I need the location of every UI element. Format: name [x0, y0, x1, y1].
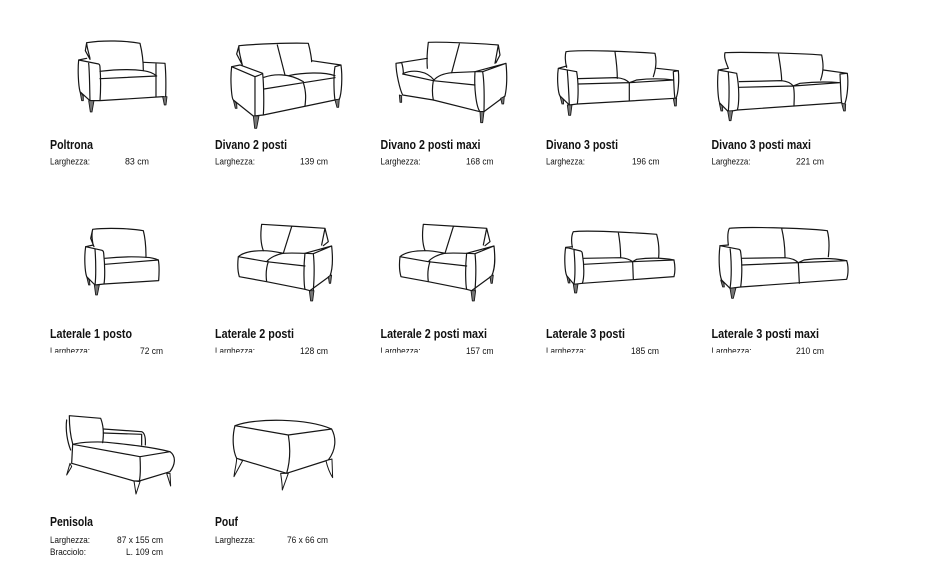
Laterale 2 posti maxi title: Laterale 2 posti maxi — [380, 326, 487, 341]
Poltrona title: Poltrona — [50, 137, 94, 152]
Laterale 1 posto title: Laterale 1 posto — [50, 326, 132, 341]
icon: Poltrona — [78, 41, 167, 112]
Laterale 3 posti width — [546, 348, 658, 354]
icon: Divano 2 posti — [231, 43, 342, 128]
Penisola dimensions: Larghezza: — [50, 535, 90, 545]
Divano 3 posti maxi width — [712, 156, 824, 166]
icon: Laterale 3 posti maxi — [719, 228, 848, 298]
Divano 2 posti width: Larghezza: — [215, 156, 255, 166]
Penisola dimensions — [50, 535, 163, 557]
Divano 2 posti width — [215, 156, 328, 166]
Divano 3 posti title: Divano 3 posti — [546, 137, 618, 152]
Divano 3 posti width: Larghezza: — [546, 156, 585, 166]
Divano 2 posti title: Divano 2 posti — [215, 137, 287, 152]
Laterale 2 posti maxi width — [381, 348, 493, 354]
Laterale 2 posti width: 128 cm — [300, 346, 328, 356]
Laterale 3 posti width: 185 cm — [631, 346, 659, 356]
icon: Divano 3 posti — [558, 51, 679, 115]
Divano 3 posti width: 196 cm — [632, 156, 660, 166]
Penisola dimensions: L. 109 cm — [126, 547, 163, 557]
Laterale 3 posti maxi title: Laterale 3 posti maxi — [712, 326, 819, 341]
icon: Divano 3 posti maxi — [718, 52, 848, 121]
Penisola dimensions: Bracciolo: — [50, 547, 86, 557]
Laterale 1 posto width — [50, 348, 162, 354]
Laterale 2 posti title: Laterale 2 posti — [215, 326, 294, 341]
Divano 2 posti maxi title: Divano 2 posti maxi — [380, 137, 480, 152]
Divano 3 posti maxi title: Divano 3 posti maxi — [712, 137, 811, 152]
Laterale 2 posti width — [216, 348, 328, 354]
icon: Divano 2 posti maxi — [396, 42, 507, 123]
Laterale 2 posti maxi width: 157 cm — [466, 346, 494, 356]
Pouf title: Pouf — [215, 514, 239, 529]
Laterale 2 posti maxi width: Larghezza: — [380, 346, 420, 356]
icon: Pouf — [233, 420, 335, 490]
Divano 2 posti maxi width: Larghezza: — [380, 156, 420, 166]
icon: Laterale 2 posti — [238, 224, 332, 301]
Divano 3 posti maxi width: 221 cm — [796, 156, 824, 166]
Divano 2 posti maxi width: 168 cm — [466, 156, 494, 166]
icon: Penisola — [66, 416, 174, 494]
icon: Laterale 1 posto — [85, 228, 159, 295]
Poltrona width: Larghezza: — [50, 156, 90, 166]
Divano 2 posti width: 139 cm — [300, 156, 328, 166]
Laterale 2 posti width: Larghezza: — [215, 346, 255, 356]
Laterale 1 posto width: Larghezza: — [50, 346, 90, 356]
Laterale 1 posto width: 72 cm — [140, 346, 163, 356]
Laterale 3 posti maxi width: Larghezza: — [712, 346, 752, 356]
Poltrona width — [50, 156, 149, 166]
Penisola title: Penisola — [50, 514, 94, 529]
Poltrona width: 83 cm — [125, 156, 149, 166]
icon: Laterale 3 posti — [565, 231, 675, 293]
Laterale 3 posti maxi width — [712, 348, 824, 354]
Pouf width: 76 x 66 cm — [287, 535, 328, 545]
Penisola dimensions: 87 x 155 cm — [117, 535, 163, 545]
Laterale 3 posti title: Laterale 3 posti — [546, 326, 625, 341]
Divano 3 posti width — [546, 156, 660, 166]
Pouf width — [215, 535, 328, 545]
icon: Laterale 2 posti maxi — [400, 224, 495, 301]
Laterale 3 posti maxi width: 210 cm — [796, 346, 824, 356]
Laterale 3 posti width: Larghezza: — [546, 346, 586, 356]
Divano 2 posti maxi width — [380, 156, 494, 166]
Divano 3 posti maxi width: Larghezza: — [712, 156, 750, 166]
Pouf width: Larghezza: — [215, 535, 255, 545]
